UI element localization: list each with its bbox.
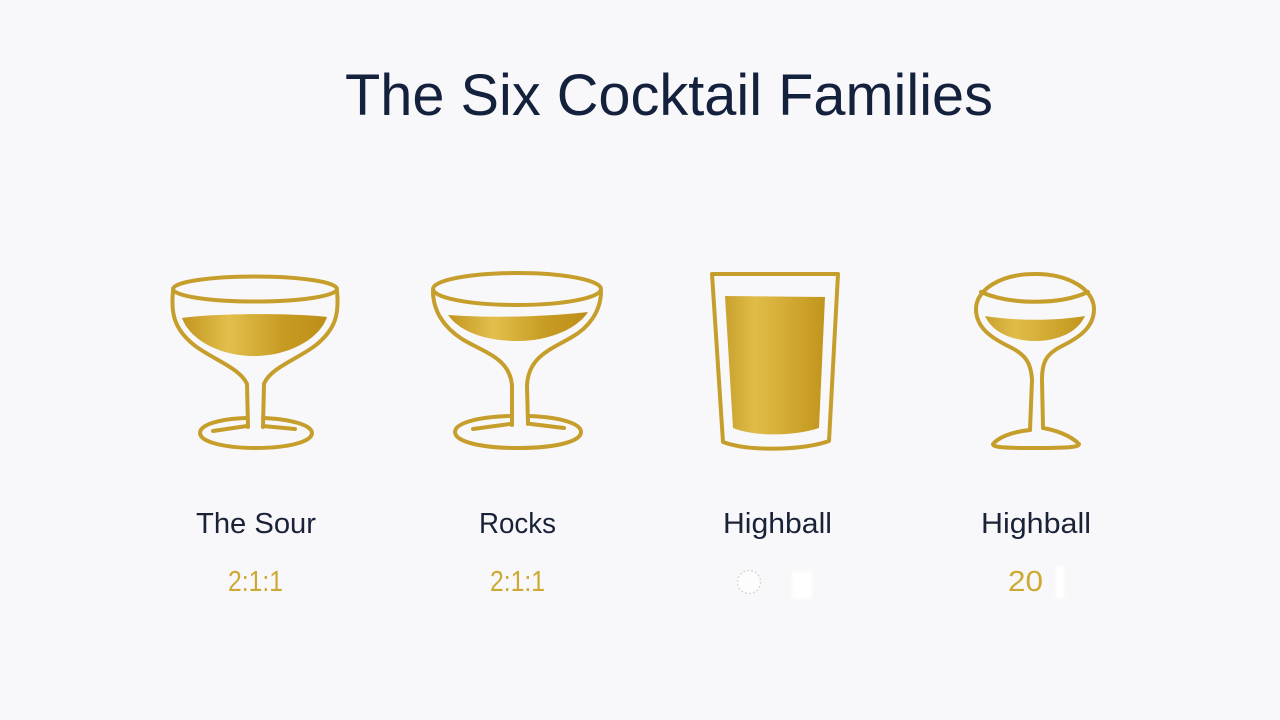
glass base xyxy=(993,428,1079,448)
label: The Sour: The Sour xyxy=(196,508,316,540)
liquid fill xyxy=(448,312,588,341)
glass rim xyxy=(433,273,601,305)
glass outline xyxy=(712,274,838,449)
faded mark xyxy=(1056,566,1064,598)
title: The Six Cocktail Families xyxy=(345,63,993,128)
ratio: highball second: 20 xyxy=(1008,566,1043,598)
ratio: rocks: 2:1:1 xyxy=(490,566,545,598)
ratio: sour: 2:1:1 xyxy=(228,566,283,598)
glass base xyxy=(455,416,581,448)
glass bowl and stem xyxy=(976,274,1094,430)
icon: sour coupe glass xyxy=(172,276,338,448)
label: Highball second: Highball xyxy=(981,508,1091,540)
liquid fill xyxy=(725,296,825,434)
label: Highball: Highball xyxy=(723,508,832,540)
glass base xyxy=(200,418,312,448)
glass rim xyxy=(173,276,337,302)
icon: narrow coupe glass xyxy=(976,274,1094,448)
glass bowl and stem xyxy=(172,291,338,427)
glass bowl and stem xyxy=(433,291,601,425)
icon: highball glass xyxy=(712,274,838,449)
label: Rocks: Rocks xyxy=(479,508,556,540)
liquid fill xyxy=(985,316,1085,341)
glass rim xyxy=(981,292,1088,302)
icon: faded ratio marks xyxy=(738,570,812,599)
icon: rocks coupe glass xyxy=(433,273,601,448)
liquid fill xyxy=(182,314,327,356)
